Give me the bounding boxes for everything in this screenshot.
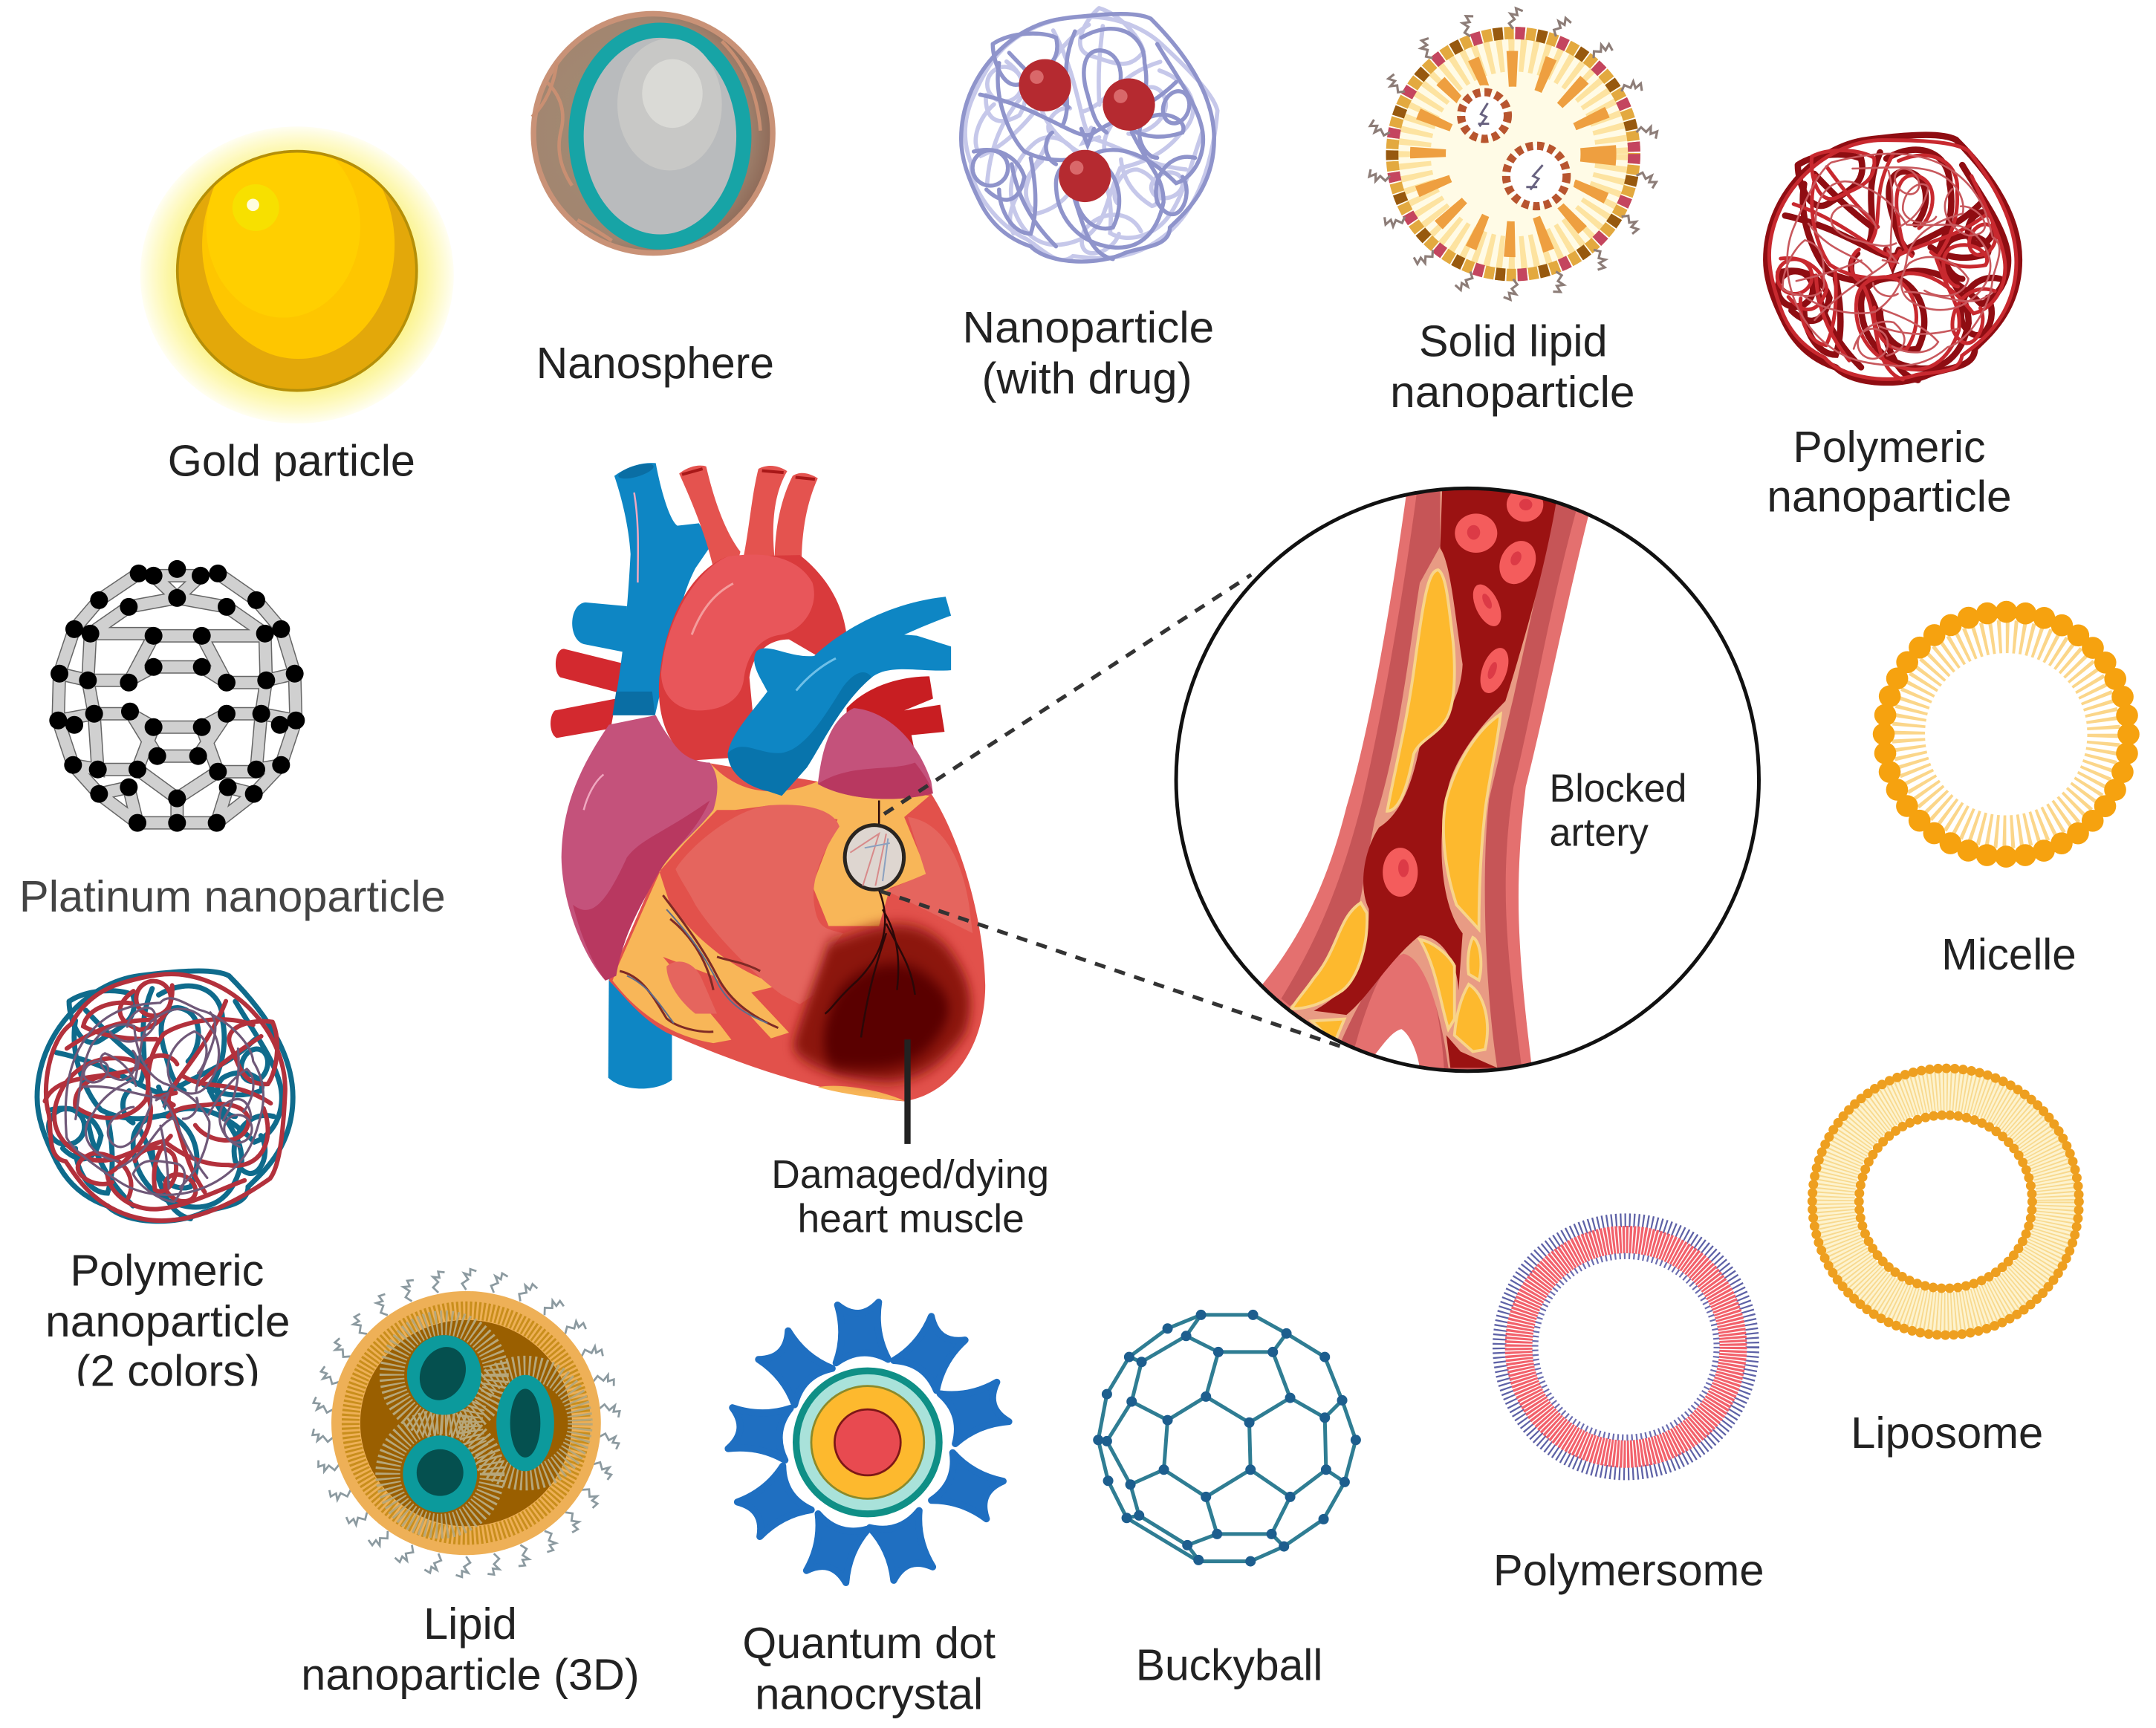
icon: solid lipid nanoparticle xyxy=(1368,8,1658,299)
icon: liposome xyxy=(1812,1068,2079,1335)
icon: polymeric nanoparticle xyxy=(1747,114,2036,405)
panel: blocked artery inset xyxy=(1176,485,1759,1072)
label: blocked artery xyxy=(1550,767,1686,854)
label: nanoparticle with drug xyxy=(963,302,1214,403)
aorta arch xyxy=(659,554,847,760)
label: lipid nanoparticle 3D xyxy=(301,1599,640,1700)
vessel: inferior vena cava xyxy=(608,971,672,1088)
label: polymeric nanoparticle two colors: (2 colors) xyxy=(76,1346,260,1396)
muscle patch xyxy=(675,805,843,1004)
icon: polymersome xyxy=(1499,1221,1753,1473)
label: quantum dot nanocrystal: Quantum dot xyxy=(742,1618,996,1668)
icon: micelle xyxy=(1884,612,2129,857)
label: nanoparticle with drug: (with drug) xyxy=(981,353,1192,403)
label: blocked artery: artery xyxy=(1550,811,1649,854)
icon: nanosphere xyxy=(532,14,773,253)
coronary vessels xyxy=(620,801,915,1037)
left atrium xyxy=(818,708,933,799)
highlight strokes xyxy=(584,493,638,810)
vessel: superior vena cava xyxy=(612,461,712,715)
label: quantum dot nanocrystal: nanocrystal xyxy=(755,1669,983,1719)
damaged muscle xyxy=(793,925,970,1101)
label: solid lipid nanoparticle xyxy=(1390,316,1635,417)
label: solid lipid nanoparticle: Solid lipid xyxy=(1419,316,1608,366)
label: polymersome: Polymersome xyxy=(1493,1545,1764,1595)
label: damaged heart muscle xyxy=(771,1152,1049,1241)
right atrium xyxy=(562,715,717,981)
label: gold particle: Gold particle xyxy=(168,435,415,485)
pulmonary artery xyxy=(728,597,951,796)
vessel: left stubs xyxy=(551,602,627,738)
label: polymeric nanoparticle xyxy=(1767,422,2012,521)
label: solid lipid nanoparticle: nanoparticle xyxy=(1390,367,1635,417)
label: nanosphere: Nanosphere xyxy=(536,338,774,388)
icon: buckyball xyxy=(1098,1315,1356,1562)
icon: lipid nanoparticle 3D xyxy=(312,1269,620,1577)
label: polymeric nanoparticle: Polymeric xyxy=(1793,422,1986,472)
ventricles xyxy=(609,762,985,1102)
vessel: right pulmonary veins xyxy=(847,676,944,753)
icon: platinum nanoparticle xyxy=(58,569,296,823)
inset circle outline xyxy=(1176,488,1759,1071)
label: damaged heart muscle: Damaged/dying xyxy=(771,1152,1049,1197)
panel: heart illustration xyxy=(551,461,985,1102)
label: polymeric nanoparticle: nanoparticle xyxy=(1767,471,2012,521)
label: polymeric nanoparticle two colors xyxy=(45,1246,290,1403)
label: polymeric nanoparticle two colors: nanoparticle xyxy=(45,1296,290,1346)
artery cross-section xyxy=(1261,485,1589,1072)
icon: gold particle xyxy=(140,126,454,423)
icon: polymeric nanoparticle two colors xyxy=(25,955,307,1241)
label: platinum nanoparticle: Platinum nanoparticle xyxy=(19,871,446,921)
label: liposome: Liposome xyxy=(1851,1408,2043,1458)
label: nanoparticle with drug: Nanoparticle xyxy=(963,302,1214,352)
pointer line to damaged muscle xyxy=(906,1039,909,1144)
label: quantum dot nanocrystal xyxy=(742,1618,996,1719)
label: lipid nanoparticle 3D: nanoparticle (3D) xyxy=(301,1650,640,1700)
arrow: dashed zoom lines xyxy=(880,575,1345,1047)
label: polymeric nanoparticle two colors: Polymeric xyxy=(70,1246,264,1296)
fat and coronary region xyxy=(612,762,929,1043)
label: micelle: Micelle xyxy=(1941,929,2077,979)
label: lipid nanoparticle 3D: Lipid xyxy=(423,1599,517,1649)
icon: quantum dot nanocrystal xyxy=(727,1302,1010,1584)
icon: nanoparticle with drug xyxy=(916,0,1261,311)
vessel: aortic branches xyxy=(679,466,818,573)
label: blocked artery: Blocked xyxy=(1550,767,1686,811)
label: damaged heart muscle: heart muscle xyxy=(797,1196,1025,1241)
inset lens on artery xyxy=(845,825,904,889)
label: buckyball: Buckyball xyxy=(1136,1640,1322,1690)
